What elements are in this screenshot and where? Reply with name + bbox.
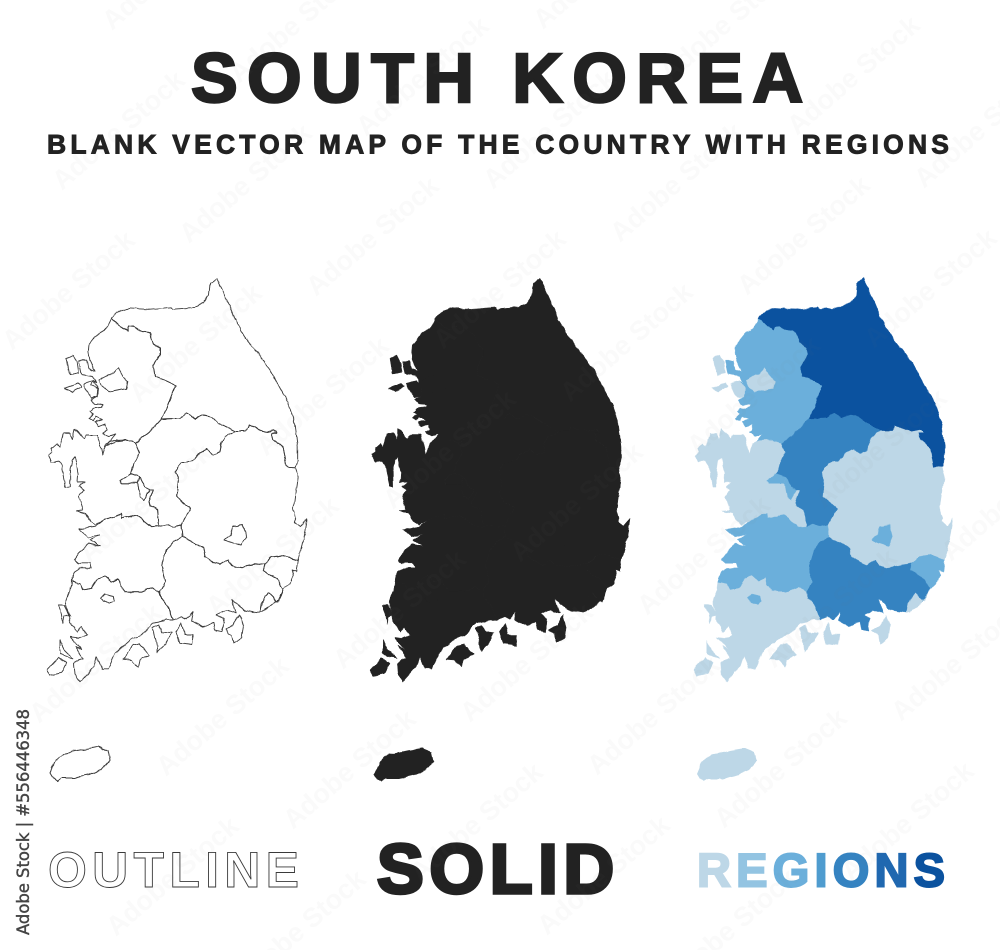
region: Sejong bbox=[767, 473, 787, 483]
watermark: Adobe Stock bbox=[173, 117, 318, 249]
island: Jeju outline bbox=[50, 747, 110, 781]
region: Daegu bbox=[872, 525, 892, 546]
region: North Jeolla bbox=[718, 513, 829, 592]
map: solid bbox=[370, 278, 630, 682]
watermark: Adobe Stock bbox=[300, 170, 445, 302]
watermark: Adobe Stock bbox=[708, 702, 853, 834]
label: solid: SOLID bbox=[377, 830, 614, 908]
watermark: Adobe Stock bbox=[581, 649, 726, 781]
watermark: Adobe Stock bbox=[277, 703, 422, 835]
watermark: Adobe Stock bbox=[681, 329, 826, 461]
watermark: Adobe Stock bbox=[200, 490, 345, 622]
region: South Gyeongsang bbox=[807, 537, 930, 632]
watermark: Adobe Stock bbox=[427, 223, 572, 355]
region: South Jeolla bbox=[712, 576, 820, 682]
label: outline: OUTLINE bbox=[48, 842, 299, 898]
region: North Gyeongsang bbox=[822, 425, 953, 568]
watermark: Adobe Stock bbox=[350, 10, 495, 142]
region: Daejeon bbox=[784, 477, 797, 500]
watermark: Adobe Stock bbox=[835, 755, 980, 887]
region: North Chungcheong bbox=[777, 413, 882, 527]
watermark: Adobe Stock bbox=[404, 756, 549, 888]
watermark: Adobe Stock bbox=[46, 64, 191, 196]
watermark: Adobe Stock bbox=[0, 224, 141, 356]
watermark: Adobe Stock bbox=[731, 169, 876, 301]
watermark: Adobe Stock bbox=[808, 382, 953, 514]
watermark: Adobe Stock bbox=[631, 489, 776, 621]
region: Incheon bbox=[712, 355, 745, 398]
island: Jeju solid bbox=[374, 748, 434, 782]
subtitle: BLANK VECTOR MAP OF THE COUNTRY WITH REGIONS bbox=[47, 130, 949, 160]
watermark: Adobe Stock bbox=[327, 543, 472, 675]
region: Gwangju bbox=[748, 594, 761, 604]
label: regions: REGIONS bbox=[697, 844, 945, 896]
region: Gyeonggi bbox=[725, 318, 822, 445]
map: outline bbox=[47, 278, 307, 682]
watermark: Adobe Stock bbox=[23, 597, 168, 729]
watermark: Adobe Stock bbox=[73, 437, 218, 569]
region: Gangwon bbox=[758, 278, 944, 467]
title: SOUTH KOREA bbox=[191, 39, 803, 117]
watermark: Adobe Stock bbox=[531, 809, 676, 941]
watermark: Adobe Stock bbox=[758, 542, 903, 674]
stock id side label: Adobe Stock | #556446348 bbox=[14, 709, 33, 935]
watermark: Adobe Stock bbox=[377, 383, 522, 515]
watermark: Adobe Stock bbox=[100, 810, 245, 942]
island: Jeju regions bbox=[697, 748, 757, 782]
watermark: Adobe Stock bbox=[604, 116, 749, 248]
watermark: Adobe Stock bbox=[554, 276, 699, 408]
watermark: Adobe Stock bbox=[123, 277, 268, 409]
region: Seoul bbox=[746, 368, 775, 392]
watermark: Adobe Stock bbox=[150, 650, 295, 782]
watermark: Adobe Stock bbox=[250, 330, 395, 462]
watermark: Adobe Stock bbox=[477, 63, 622, 195]
southern islands bbox=[693, 605, 890, 676]
watermark: Adobe Stock bbox=[781, 9, 926, 141]
region: Ulsan bbox=[910, 555, 945, 588]
region: Busan bbox=[907, 588, 930, 613]
region: South Chungcheong bbox=[695, 428, 806, 527]
watermark: Adobe Stock bbox=[504, 436, 649, 568]
watermark: Adobe Stock bbox=[454, 596, 599, 728]
watermark: Adobe Stock bbox=[858, 222, 1000, 354]
map: regions bbox=[693, 278, 953, 682]
